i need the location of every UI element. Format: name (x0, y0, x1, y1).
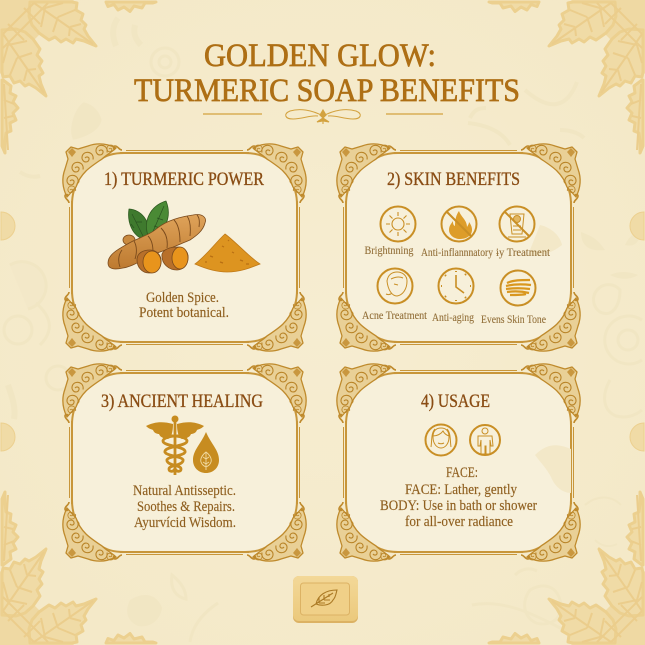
panel 1 heading: 1) TURMERIC POWER (104, 169, 264, 190)
panel 4 heading: 4) USAGE (421, 391, 490, 412)
panel 2 benefit labels: ɨy Treatment (496, 247, 551, 259)
icon: crossed-out oily treatment (500, 206, 534, 242)
panel: usage (337, 364, 580, 561)
panel: turmeric power (63, 144, 306, 351)
panel 3 text: Ayurvícid Wisdom. (134, 515, 236, 531)
panel 2 heading: 2) SKIN BENEFITS (387, 169, 520, 190)
panel 1 text: Potent botanical. (139, 305, 229, 321)
icon: evens skin tone (500, 270, 536, 306)
title: TURMERIC SOAP BENEFITS (134, 73, 520, 109)
icon: brightening sun (380, 206, 416, 242)
panel 2 benefit labels: Acne Treatment (362, 310, 428, 322)
ornamental corner: top left (0, 0, 156, 153)
panel 2 benefit labels: Anti-aging (432, 312, 474, 324)
panel 1 text: Golden Spice. (146, 290, 219, 306)
icon: anti-aging clock (438, 268, 474, 304)
panel 3 frame (63, 364, 306, 561)
panel 2 benefit labels (362, 245, 551, 326)
panel 2 benefit labels: Brightnning (364, 245, 414, 257)
panel: ancient healing (63, 364, 306, 561)
side ornaments (1, 212, 644, 451)
panel 1 frame (63, 144, 306, 351)
faint stain in panel 4 (535, 445, 571, 493)
panel 4 text: BODY: Use in bath or shower (380, 498, 537, 514)
faint stain in panel 2 (528, 225, 562, 255)
title divider flourish (203, 110, 443, 124)
panel 1 text (139, 290, 229, 321)
title: GOLDEN GLOW: (204, 38, 436, 74)
icon: body (470, 425, 500, 455)
panel 3 text (133, 483, 236, 531)
panel 2 benefit labels: Evens Skin Tone (481, 314, 546, 326)
icon: anti-inflammatory flame (442, 206, 476, 242)
icon: turmeric powder pile (195, 234, 260, 272)
icon: oil drop with leaf (193, 432, 219, 473)
title (134, 38, 520, 109)
icon: face (426, 424, 456, 456)
panel 4 text: FACE: (446, 465, 478, 481)
ornamental corner: bottom right (489, 492, 645, 645)
panel 4 text: FACE: Lather, gently (405, 482, 517, 498)
icon: soap bar (293, 576, 358, 623)
panel 4 text (380, 465, 537, 530)
panel 3 heading: 3) ANCIENT HEALING (101, 391, 263, 412)
ornamental corner: top right (489, 0, 645, 153)
panel 2 frame (337, 144, 580, 351)
panel 4 frame (337, 364, 580, 561)
ornamental corner: bottom left (0, 492, 156, 645)
panel 4 text: for all-over radiance (405, 514, 513, 530)
icon: caduceus (146, 416, 204, 475)
icon: acne treatment face (378, 268, 412, 304)
panel: skin benefits (337, 144, 580, 351)
panel 2 benefit labels: Anti-inflannnatory (421, 247, 493, 259)
panel 3 text: Soothes & Repairs. (137, 499, 235, 515)
panel 3 text: Natural Antisseptic. (133, 483, 236, 499)
icon: turmeric root with leaves (108, 201, 206, 273)
